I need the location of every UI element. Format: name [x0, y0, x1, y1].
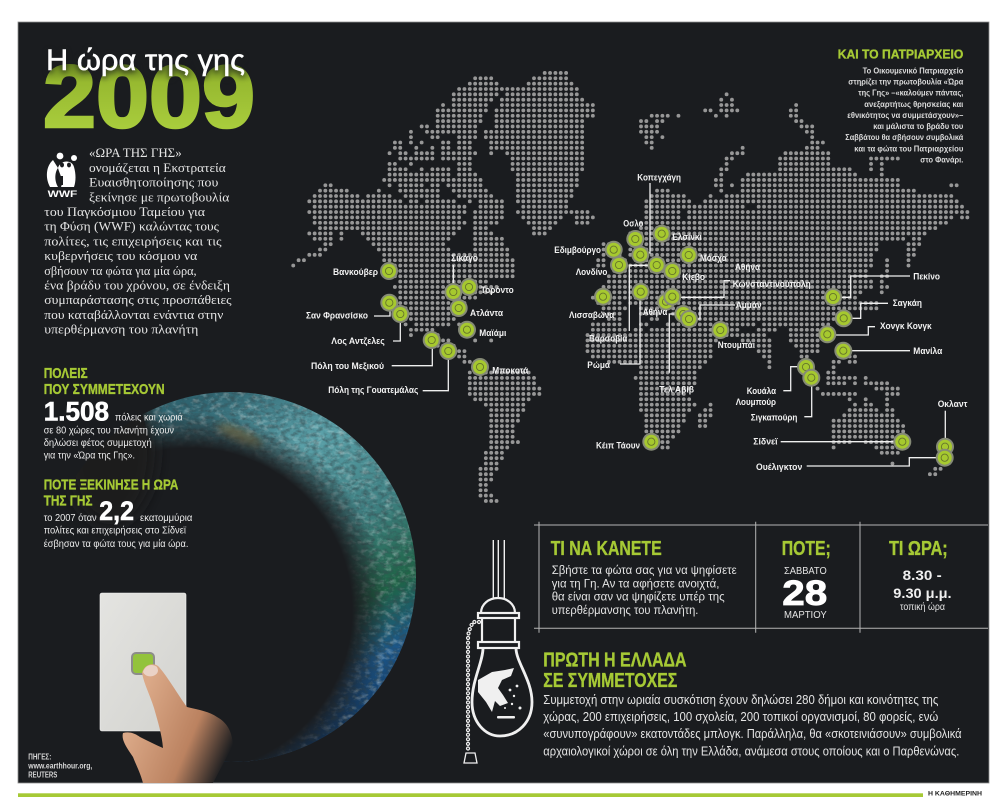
body text — [44, 512, 193, 550]
Guatemala City — [328, 342, 457, 395]
Rome: Ρώμα — [587, 360, 610, 370]
Tel Aviv: Τελ Αβίβ — [659, 384, 694, 394]
Oslo: Οσλο — [623, 218, 644, 228]
intro text: τη Φύση (WWF) καλώντας τους — [44, 219, 220, 234]
year 2009: 2009 — [43, 47, 255, 146]
Bogota — [471, 358, 529, 376]
intro text: ένα βράδυ του χρόνου, σε ένδειξη — [44, 278, 230, 292]
text block: και τα φώτα του Πατριαρχείου — [854, 143, 963, 153]
callout: Patriarchate — [838, 46, 964, 164]
heading: ΤΗΣ ΓΗΣ — [44, 492, 92, 510]
body text: για την «Ώρα της Γης». — [44, 450, 135, 462]
San Francisco: Σαν Φρανσίσκο — [306, 310, 368, 320]
world dot map — [293, 73, 968, 501]
Helsinki — [653, 225, 702, 243]
Helsinki: Ελσίνκι — [672, 232, 702, 242]
Istanbul: Κωνσταντινούπολη — [733, 279, 811, 289]
sources: REUTERS — [28, 770, 58, 780]
panel: what to do: υπερθέρμανσης του πλανήτη. — [552, 603, 698, 617]
panel: when it started — [44, 476, 193, 550]
text block: της Γης» –«καλούμεν πάντας, — [858, 88, 963, 98]
icon: light bulb with pull chain and Greece — [464, 540, 532, 763]
Singapore — [751, 369, 820, 422]
panel: when: ΜΑΡΤΙΟΥ — [784, 610, 827, 621]
Edinburgh — [554, 241, 623, 259]
Chicago: Σικάγο — [451, 253, 478, 263]
Hong Kong — [818, 321, 933, 343]
heading — [44, 365, 165, 398]
body text: εκατομμύρια — [140, 512, 193, 524]
sources: ΠΗΓΕΣ: — [28, 752, 51, 762]
panel: what to do: ΤΙ ΝΑ ΚΑΝΕΤΕ — [551, 538, 662, 560]
Shanghai: Σαγκάη — [893, 298, 922, 308]
Kuala Lumpur: Κουάλα — [747, 386, 776, 396]
intro text: «ΩΡΑ ΤΗΣ ΓΗΣ» — [89, 145, 182, 160]
text block: στηρίζει την πρωτοβουλία «Ώρα — [848, 77, 964, 87]
body text: πόλεις και χωριά — [115, 412, 183, 424]
Moscow: Μόσχα — [700, 253, 727, 263]
body text: έσβησαν τα φώτα τους για μία ώρα. — [44, 538, 188, 550]
Oslo — [623, 218, 644, 248]
number 2,2: 2,2 — [99, 496, 134, 526]
green button — [132, 653, 154, 674]
Atlanta: Ατλάντα — [470, 308, 503, 318]
Wellington — [756, 449, 954, 472]
light switch with hand — [100, 593, 233, 783]
Singapore: Σιγκαπούρη — [751, 412, 797, 422]
city markers and labels — [306, 172, 967, 472]
intro text: που καταβάλλονται ενάντια στην — [44, 307, 223, 322]
sources — [27, 752, 92, 780]
Hong Kong: Χονγκ Κονγκ — [880, 321, 933, 331]
map of Greece — [478, 668, 522, 718]
Vancouver — [333, 262, 398, 280]
intro text: κυβερνήσεις του κόσμου να — [44, 248, 197, 263]
Miami — [458, 321, 507, 339]
Tel Aviv — [659, 305, 694, 394]
Warsaw — [589, 256, 666, 344]
panel: what time: τοπική ώρα — [900, 601, 945, 613]
Toronto: Τορόντο — [481, 285, 514, 295]
panel: participating cities — [44, 365, 183, 462]
Toronto — [460, 278, 514, 296]
Sydney: Σίδνεϊ — [753, 436, 778, 446]
text block — [845, 66, 964, 164]
heading: ΠΟΤΕ ΞΕΚΙΝΗΣΕ Η ΩΡΑ — [44, 476, 179, 494]
Auckland — [936, 399, 967, 456]
title — [43, 44, 255, 146]
Athens — [643, 293, 675, 317]
text block: ανεξαρτήτως θρησκείας και — [864, 99, 964, 109]
fingernail — [143, 665, 158, 676]
Vancouver: Βανκούβερ — [333, 267, 378, 277]
panel: what to do: Σβήστε τα φώτα σας για να ψηφίσετε — [552, 563, 737, 577]
intro text: Ευαισθητοποίησης που — [89, 175, 218, 190]
text block: Σαββάτου θα σβήσουν συμβολικά — [845, 132, 964, 142]
intro text — [44, 145, 232, 336]
Cape Town: Κέιπ Τάουν — [596, 440, 640, 450]
panel: what time — [889, 538, 952, 613]
footer green bar — [18, 793, 923, 797]
Wellington: Ουέλιγκτον — [756, 462, 802, 472]
Dubai — [711, 321, 755, 350]
Beijing: Πεκίνο — [913, 272, 940, 282]
sources: www.earthhour.org, — [27, 762, 92, 770]
Auckland: Οκλαντ — [938, 399, 967, 409]
panel: when: ΣΑΒΒΑΤΟ — [784, 566, 827, 577]
panel: what to do: θα είναι σαν να ψηφίζετε υπέρ της — [552, 590, 725, 604]
panel: when — [782, 538, 831, 621]
Kuala Lumpur — [736, 358, 815, 407]
Kiev: Κίεβο — [682, 272, 705, 282]
Amman: Αμμάν — [736, 300, 762, 310]
heading: ΠΡΩΤΗ Η ΕΛΛΑΔΑ — [543, 650, 687, 672]
panel: what to do: για τη Γη. Αν τα αφήσετε ανοιχτά, — [552, 576, 719, 590]
Chicago — [444, 253, 478, 301]
Manila: Μανίλα — [913, 346, 943, 356]
panel: what time: 8.30 - — [903, 567, 942, 583]
switch plate — [100, 593, 186, 731]
text block: και μάλιστα το βράδυ του — [873, 121, 963, 131]
earth globe — [142, 392, 416, 762]
intro text: σβήσουν τα φώτα για μία ώρα, — [44, 263, 197, 278]
Moscow — [680, 246, 727, 264]
intro text: ονομάζεται η Εκστρατεία — [89, 160, 226, 175]
heading: ΠΟΥ ΣΥΜΜΕΤΕΧΟΥΝ — [44, 381, 165, 398]
intro text: συμπαράστασης στις προσπάθειες — [44, 292, 232, 307]
pull handle — [464, 753, 477, 763]
Lisbon: Λισσαβώνα — [569, 310, 615, 320]
panel: when: ΠΟΤΕ; — [782, 538, 831, 560]
hand — [123, 664, 233, 783]
Shanghai — [835, 298, 922, 327]
text block — [543, 692, 962, 758]
Dubai: Ντουμπάι — [718, 340, 755, 350]
Cape Town — [596, 433, 660, 451]
body text — [44, 412, 183, 462]
panel: when: 28 — [782, 574, 827, 613]
body text: σε 80 χώρες του πλανήτη έχουν — [44, 424, 174, 436]
Atlanta — [450, 299, 503, 318]
heading: ΣΕ ΣΥΜΜΕΤΟΧΕΣ — [543, 670, 677, 692]
Kuala Lumpur: Λουμπούρ — [736, 397, 776, 407]
Athens: Αθήνα — [643, 307, 668, 317]
intro text: ξεκίνησε με πρωτοβουλία — [89, 189, 229, 204]
Guatemala City: Πόλη της Γουατεμάλας — [328, 385, 419, 395]
body text: το 2007 όταν — [44, 512, 97, 524]
Beijing — [824, 272, 940, 306]
panel: what to do — [551, 538, 737, 617]
San Francisco — [306, 294, 398, 320]
Miami: Μαϊάμι — [479, 328, 507, 338]
body text: δηλώσει φέτος συμμετοχή — [44, 437, 152, 449]
panel: what time: 9.30 μ.μ. — [893, 585, 952, 601]
pull chain — [468, 622, 479, 752]
heading: ΠΟΛΕΙΣ — [44, 365, 88, 382]
Copenhagen — [631, 172, 681, 264]
Los Angeles: Λος Αντζελες — [331, 336, 385, 346]
number 1.508: 1.508 — [44, 397, 109, 427]
London: Λονδίνο — [576, 267, 608, 277]
Sydney — [753, 433, 911, 451]
Copenhagen: Κοπεγχάγη — [637, 172, 681, 182]
icon: WWF panda: WWF — [48, 189, 78, 199]
panel: what time: ΤΙ ΩΡΑ; — [889, 538, 948, 560]
intro text: του Παγκόσμιου Ταμείου για — [44, 204, 205, 219]
Mexico City: Πόλη του Μεξικού — [311, 361, 384, 371]
text block: εθνικότητος να συμμετάσχουν»– — [847, 110, 964, 120]
Lisbon — [569, 288, 615, 320]
panel: Greece first in participation — [543, 650, 962, 758]
heading: Η ώρα της γης — [46, 44, 245, 77]
Rome — [587, 283, 650, 370]
Manila — [834, 342, 943, 360]
Mexico City — [311, 331, 441, 371]
Bogota: Μποκοτά — [492, 366, 529, 376]
Edinburgh: Εδιμβούργο — [554, 245, 601, 255]
intro text: υπερθέρμανση του πλανήτη — [44, 322, 199, 336]
Athens label, upper: Αθήνα — [735, 262, 760, 272]
text block: στο Φανάρι. — [920, 154, 963, 164]
intro text: πολίτες, τις επιχειρήσεις και τις — [44, 233, 223, 248]
heading — [543, 650, 687, 692]
Kiev — [663, 262, 705, 282]
heading: ΚΑΙ ΤΟ ΠΑΤΡΙΑΡΧΕΙΟ — [838, 46, 963, 62]
text block: Συμμετοχή στην ωριαία συσκότιση έχουν δηλώσει 280 δήμοι και κοινότητες της — [543, 692, 938, 707]
text block: χώρας, 200 επιχειρήσεις, 100 σχολεία, 200 τοπικοί οργανισμοί, 80 φορείς, ενώ — [543, 709, 938, 724]
Los Angeles — [331, 305, 409, 346]
Istanbul — [663, 279, 811, 306]
icon: WWF panda — [47, 153, 78, 199]
text block: Το Οικουμενικό Πατριαρχείο — [863, 66, 963, 76]
London — [576, 256, 628, 277]
body text: πολίτες και επιχειρήσεις στο Σίδνεϊ — [44, 524, 187, 536]
info frame: what, when, time — [534, 522, 988, 633]
Amman — [680, 300, 762, 328]
Warsaw: Βαρσοβία — [589, 334, 628, 344]
heading — [44, 476, 179, 510]
